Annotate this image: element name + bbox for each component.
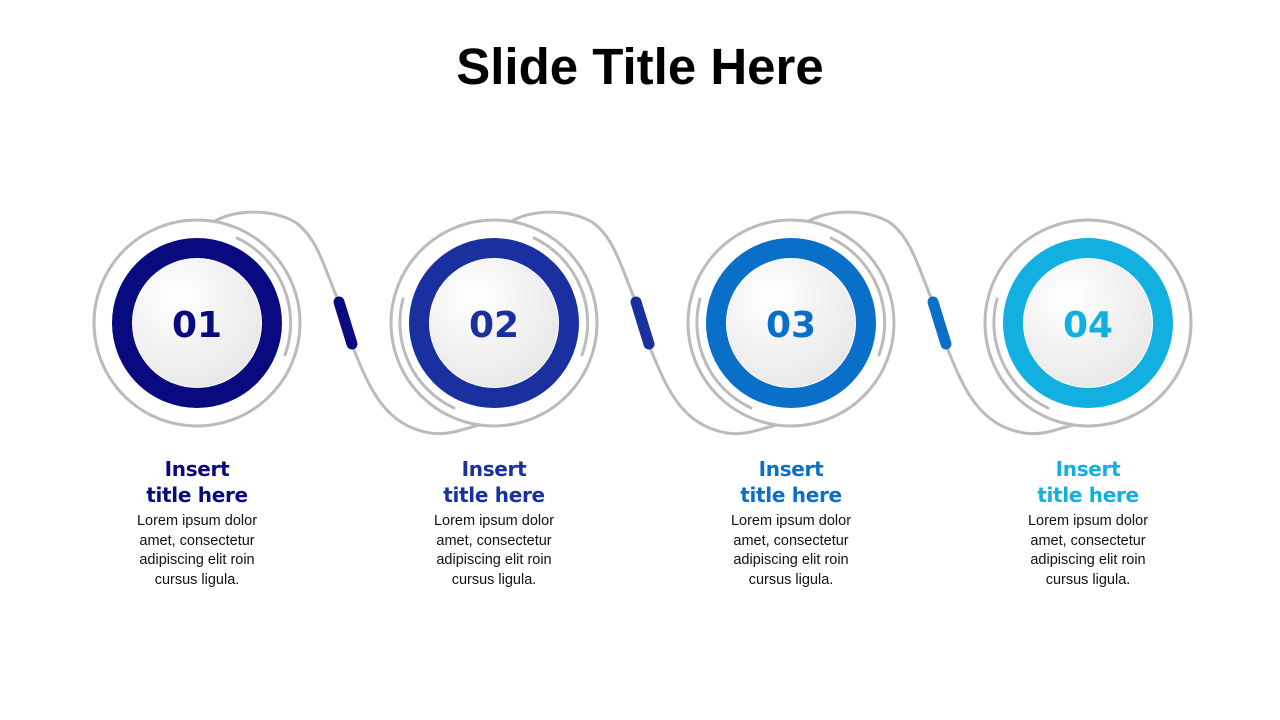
- caption 1: amet, consectetur: [139, 532, 255, 548]
- caption 3: title here: [740, 483, 842, 507]
- caption 4: amet, consectetur: [1030, 532, 1146, 548]
- step 4 circle: [985, 220, 1191, 426]
- caption 2: adipiscing elit roin: [436, 552, 552, 568]
- caption 2: Lorem ipsum dolor: [434, 513, 554, 529]
- caption 4: cursus ligula.: [1046, 572, 1130, 588]
- caption 1: adipiscing elit roin: [139, 552, 255, 568]
- step 3 circle: 03: [766, 305, 816, 346]
- caption 3: Insert: [759, 457, 823, 481]
- caption 2: title here: [443, 483, 545, 507]
- step 1 circle: [94, 220, 300, 426]
- step 1 circle: 01: [172, 305, 222, 346]
- caption 1: Lorem ipsum dolor: [137, 513, 257, 529]
- caption 2: amet, consectetur: [436, 532, 552, 548]
- step 4 circle: 04: [1063, 305, 1113, 346]
- step 2 circle: [391, 220, 597, 426]
- connector 2-3: [512, 212, 777, 434]
- caption 2: Insert: [462, 457, 526, 481]
- connector 3-4: [809, 212, 1074, 434]
- caption 1: cursus ligula.: [155, 572, 239, 588]
- caption 3: Lorem ipsum dolor: [731, 513, 851, 529]
- step 2 circle: 02: [469, 305, 519, 346]
- caption 3: [731, 457, 851, 588]
- caption 1: Insert: [165, 457, 229, 481]
- caption 1: title here: [146, 483, 248, 507]
- caption 3: adipiscing elit roin: [733, 552, 849, 568]
- caption 4: Insert: [1056, 457, 1120, 481]
- title: Slide Title Here: [456, 38, 824, 95]
- caption 4: adipiscing elit roin: [1030, 552, 1146, 568]
- caption 2: cursus ligula.: [452, 572, 536, 588]
- caption 2: [434, 457, 554, 588]
- caption 4: Lorem ipsum dolor: [1028, 513, 1148, 529]
- connector 1-2: [215, 212, 480, 434]
- caption 3: amet, consectetur: [733, 532, 849, 548]
- caption 4: [1028, 457, 1148, 588]
- caption 1: [137, 457, 257, 588]
- caption 4: title here: [1037, 483, 1139, 507]
- caption 3: cursus ligula.: [749, 572, 833, 588]
- step 3 circle: [688, 220, 894, 426]
